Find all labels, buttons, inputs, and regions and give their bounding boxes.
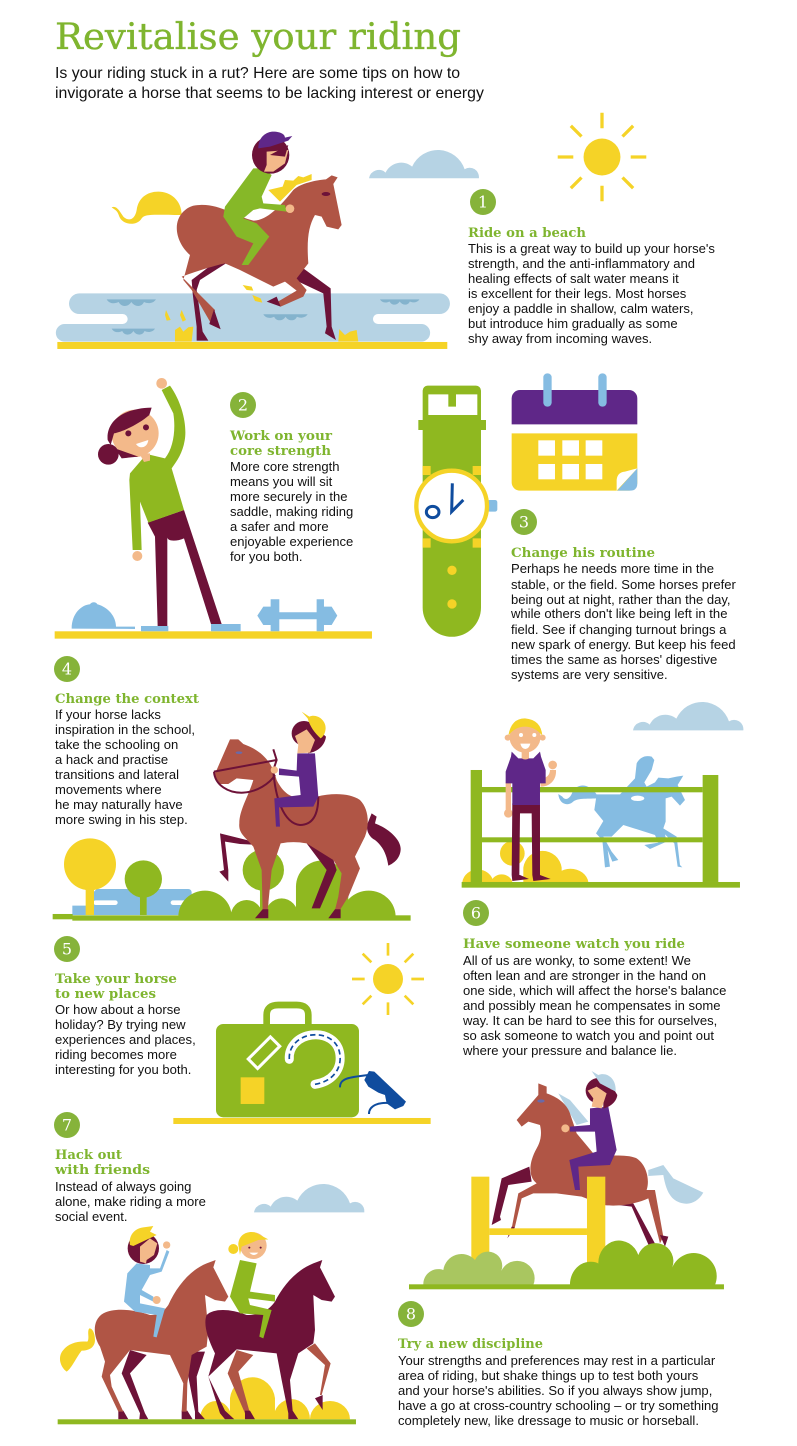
body text: systems are very sensitive.	[511, 667, 668, 682]
number badge 6	[463, 900, 489, 926]
number badge 2	[230, 392, 256, 418]
title: Revitalise your riding	[55, 17, 461, 58]
body text: inspiration in the school,	[55, 722, 195, 737]
body text: but introduce him gradually as some	[468, 316, 678, 331]
number badge 4: 4	[62, 660, 72, 678]
panel: tip 5 new places	[54, 936, 431, 1124]
number badge 8	[398, 1301, 424, 1327]
illustration: man at fence watching rider	[462, 718, 740, 888]
body text: Instead of always going	[55, 1179, 191, 1194]
number badge 4	[54, 656, 80, 682]
panel: tip 6 someone watching	[462, 702, 743, 1058]
heading: Have someone watch you ride	[463, 937, 685, 952]
number badge 5	[54, 936, 80, 962]
number badge 2: 2	[238, 396, 248, 414]
heading: Take your horse	[55, 972, 177, 987]
number badge 8: 8	[406, 1304, 416, 1324]
number badge 1: 1	[478, 192, 488, 212]
heading: with friends	[54, 1163, 150, 1178]
number badge 5: 5	[62, 940, 72, 958]
number badge 3: 3	[519, 512, 529, 532]
body text: movements where	[55, 782, 162, 797]
icon: cloud	[369, 150, 479, 178]
icon: sun	[558, 113, 646, 201]
panel: tip 8 try a new discipline	[398, 1071, 724, 1428]
heading: Change his routine	[511, 546, 655, 561]
heading: Hack out	[55, 1148, 122, 1163]
body text: All of us are wonky, to some extent! We	[463, 953, 691, 968]
body text: Perhaps he needs more time in the	[511, 561, 714, 576]
heading: Ride on a beach	[468, 226, 587, 241]
body text: area of riding, but shake things up to test both yours	[398, 1368, 699, 1383]
body text: have a go at cross-country schooling – or try something	[398, 1398, 719, 1413]
body text: Or how about a horse	[55, 1002, 180, 1017]
icon: calendar	[512, 373, 637, 491]
body text: If your horse lacks	[55, 707, 161, 722]
body text: he may naturally have	[55, 797, 183, 812]
body text: times the same as horses' digestive	[511, 652, 717, 667]
illustration: rider on horse with trees	[53, 712, 411, 921]
body text: Your strengths and preferences may rest in a particular	[398, 1353, 716, 1368]
icon: cloud	[633, 702, 743, 730]
body text: being out at night, rather than the day,	[511, 592, 731, 607]
illustration: galloping rider on beach	[56, 132, 450, 349]
panel: tip 4 change the context	[53, 656, 411, 921]
body text: take the schooling on	[55, 737, 178, 752]
body text: more swing in his step.	[55, 812, 188, 827]
body text: holiday? By trying new	[55, 1017, 186, 1032]
icon: sun	[352, 943, 424, 1015]
panel: tip 1 ride on a beach	[56, 113, 715, 349]
number badge 3	[511, 509, 537, 535]
body text: a safer and more	[230, 519, 329, 534]
number badge 7	[54, 1112, 80, 1138]
body text: healing effects of salt water means it	[468, 271, 679, 286]
body text: More core strength	[230, 459, 340, 474]
body text: one side, which will affect the horse's balance	[463, 983, 726, 998]
heading: core strength	[230, 444, 332, 459]
illustration: horse jumping fence	[409, 1071, 724, 1289]
heading: Change the context	[55, 692, 199, 707]
heading: Work on your	[229, 429, 332, 444]
body text: new spark of energy. But keep his feed	[511, 637, 736, 652]
heading: Try a new discipline	[398, 1337, 543, 1352]
body text: enjoyable experience	[230, 534, 353, 549]
body text: enjoy a paddle in shallow, calm waters,	[468, 301, 694, 316]
body text: more securely in the	[230, 489, 347, 504]
icon: wristwatch	[416, 386, 497, 637]
number badge 1	[470, 189, 496, 215]
intro text: invigorate a horse that seems to be lacking interest or energy	[55, 85, 484, 102]
body text: transitions and lateral	[55, 767, 179, 782]
body text: experiences and places,	[55, 1032, 196, 1047]
body text: completely new, like dressage to music or horseball.	[398, 1413, 699, 1428]
body text: means you will sit	[230, 474, 333, 489]
body text: interesting for you both.	[55, 1062, 191, 1077]
heading: to new places	[55, 987, 156, 1002]
body text: strength, and the anti-inflammatory and	[468, 256, 695, 271]
body text: alone, make riding a more	[55, 1194, 206, 1209]
body text: for you both.	[230, 549, 303, 564]
body text: stable, or the field. Some horses prefer	[511, 577, 736, 592]
illustration: stretching woman with hat and dumbbell	[55, 378, 372, 639]
panel: tip 3 change routine	[416, 373, 736, 682]
body text: shy away from incoming waves.	[468, 331, 652, 346]
body text: where your pressure and balance lie.	[462, 1043, 677, 1058]
body text: a hack and practise	[55, 752, 168, 767]
body text: and possibly mean he compensates in some	[463, 998, 720, 1013]
body text: saddle, making riding	[230, 504, 353, 519]
body text: and your horse's abilities. So if you always show jump,	[398, 1383, 712, 1398]
body text: riding becomes more	[55, 1047, 177, 1062]
icon: cloud	[254, 1184, 364, 1212]
panel: tip 2 core strength	[55, 378, 372, 639]
illustration: suitcase with horseshoe and sunglasses	[173, 1005, 431, 1124]
body text: while others don't like being left in the	[510, 606, 727, 621]
body text: way. It can be hard to see this for ourselves,	[462, 1013, 717, 1028]
body text: This is a great way to build up your horse's	[468, 241, 715, 256]
intro text: Is your riding stuck in a rut? Here are some tips on how to	[55, 65, 460, 82]
body text: field. See if changing turnout brings a	[511, 622, 727, 637]
body text: social event.	[55, 1209, 128, 1224]
panel: tip 7 hack out with friends	[54, 1112, 364, 1424]
body text: is excellent for their legs. Most horses	[468, 286, 687, 301]
body text: often lean and are stronger in the hand on	[463, 968, 706, 983]
number badge 7: 7	[62, 1116, 72, 1134]
body text: so ask someone to watch you and point out	[463, 1028, 714, 1043]
number badge 6: 6	[471, 904, 481, 922]
illustration: two riders on horses	[58, 1226, 356, 1424]
